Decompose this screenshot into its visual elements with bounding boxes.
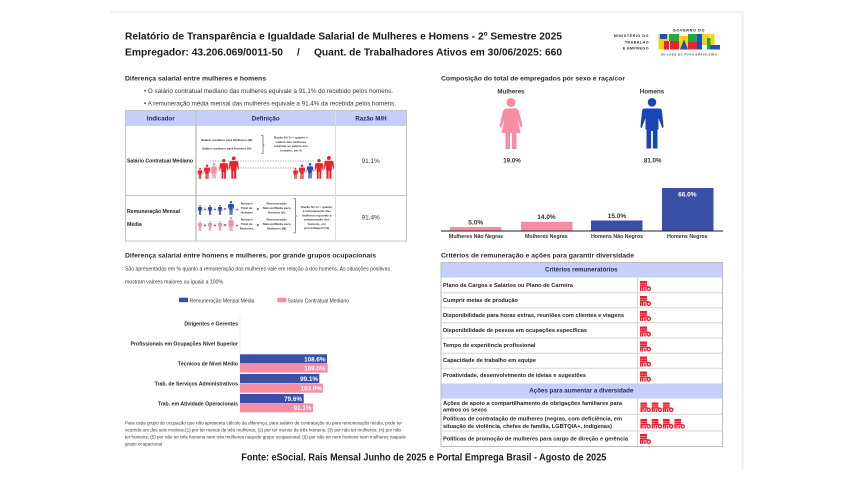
logo: ministério e governo: DO LADO DO POVO BRASILEIRO bbox=[661, 52, 718, 56]
bar chart: sexo e raça: Homens Não Negros bbox=[591, 234, 643, 240]
icons: indicadores de adoção bbox=[640, 281, 684, 444]
section: critérios de remuneração bbox=[441, 253, 722, 446]
bar chart: grupos ocupacionais: 108.6% bbox=[304, 356, 326, 363]
table: critérios: Disponibilidade para horas extras, reuniões com clientes e viagens bbox=[443, 313, 624, 319]
bar chart: sexo e raça: Homens Negros bbox=[667, 234, 708, 240]
bar chart: grupos ocupacionais: Trab. em Atividade Operacionais bbox=[158, 402, 238, 408]
table: critérios bbox=[441, 262, 722, 446]
bullet texts bbox=[144, 88, 396, 108]
legend bbox=[179, 298, 349, 304]
table: indicadores: Razão M/H bbox=[355, 116, 387, 122]
text: explicação: São apresentadas em % quanto a remuneração das mulheres vale em relação à dos homens. As situações positivas bbox=[125, 267, 390, 273]
legend: Remuneração Mensal Média bbox=[190, 298, 255, 304]
title bbox=[125, 32, 562, 58]
table: critérios: Critérios remuneratórios bbox=[545, 267, 618, 274]
footnote: ter homens; (5) por não ter três homens nem três mulheres naquele grupo ocupacional; (6) por não ter nem homens nem mulheres naquele bbox=[125, 435, 406, 440]
table: critérios: Plano de Cargos e Salários ou Plano de Carreira bbox=[443, 283, 574, 289]
bar chart: sexo e raça: 66.0% bbox=[678, 192, 697, 199]
diagram: remuneração média: Total de bbox=[241, 222, 253, 226]
diagram: remuneração média: Homens (H) bbox=[268, 210, 285, 214]
page frame bbox=[110, 12, 742, 470]
diagram: salário mediano bbox=[198, 136, 334, 179]
diagram: remuneração média: mulheres equivale à bbox=[302, 213, 332, 217]
diagram: remuneração média: Número bbox=[241, 218, 253, 222]
title: / bbox=[297, 48, 300, 58]
bar chart: sexo e raça: 14.0% bbox=[537, 214, 556, 221]
table: indicadores: Definição bbox=[252, 116, 280, 122]
diagram: remuneração média: Mulheres bbox=[240, 226, 254, 230]
diagram: remuneração média: ÷ bbox=[236, 223, 239, 229]
diagram: remuneração média: remuneração dos bbox=[304, 218, 330, 222]
table: critérios: ambos os sexos bbox=[443, 408, 487, 414]
bar chart: grupos ocupacionais: 109.0% bbox=[304, 366, 326, 372]
diagram: remuneração média: = bbox=[257, 207, 260, 213]
bar chart: sexo e raça: 5.0% bbox=[468, 220, 483, 226]
diagram: remuneração média: Remuneração bbox=[266, 218, 287, 222]
table: critérios: Disponibilidade de pessoa em ocupações específicas bbox=[443, 328, 587, 334]
title: Empregador: 43.206.069/0011-50 bbox=[125, 48, 283, 58]
bar chart: grupos ocupacionais bbox=[130, 316, 328, 412]
footnote: grupo ocupacional bbox=[125, 442, 162, 447]
heading: Critérios de remuneração e ações para garantir diversidade bbox=[441, 253, 634, 260]
icon: homem: Homens bbox=[640, 88, 665, 95]
table: indicadores: 91.1% bbox=[362, 158, 380, 165]
diagram: remuneração média: porcentagem (%) bbox=[304, 226, 329, 230]
bar chart: grupos ocupacionais: Profissionais em Ocupações Nível Superior bbox=[130, 342, 238, 348]
bar chart: grupos ocupacionais: 99.1% bbox=[300, 376, 318, 383]
bullet texts: • O salário contratual mediano das mulheres equivale a 91.1% do recebido pelos homens. bbox=[144, 88, 393, 95]
diagram: remuneração média: + bbox=[214, 207, 217, 213]
diagram: remuneração média: Homens bbox=[241, 210, 253, 214]
table: indicadores: Salário Contratual Mediano bbox=[127, 158, 193, 164]
diagram: salário mediano: salário das mulheres bbox=[276, 140, 307, 144]
table: indicadores: Média bbox=[127, 222, 142, 228]
diagram: remuneração média: ÷ bbox=[236, 207, 239, 213]
diagram: salário mediano: Razão M / H = quanto o bbox=[274, 136, 308, 140]
table: indicadores: Remuneração Mensal bbox=[127, 209, 181, 215]
footnote bbox=[125, 421, 406, 447]
table: indicadores: Indicador bbox=[147, 116, 175, 122]
title: Quant. de Trabalhadores Ativos em 30/06/2025: 660 bbox=[314, 48, 562, 58]
diagram: remuneração média: Mulheres (M) bbox=[267, 226, 286, 230]
diagram: salário mediano: Salário mediano para Homens (H) bbox=[202, 146, 251, 150]
text: explicação: mostram valores maiores ou iguais a 100% bbox=[125, 280, 223, 286]
diagram: remuneração média: Número bbox=[241, 202, 253, 206]
heading: Diferença salarial entre mulheres e homens bbox=[125, 76, 266, 82]
table: critérios: Tempo de experiência profissional bbox=[443, 343, 536, 349]
bar chart: grupos ocupacionais: 103.9% bbox=[301, 386, 322, 392]
icon: mulher: Mulheres bbox=[497, 88, 525, 95]
section: composição por sexo e raça/cor bbox=[441, 76, 723, 240]
icon: homem bbox=[640, 88, 665, 164]
diagram: remuneração média: homens, em bbox=[308, 222, 326, 226]
diagram: remuneração média: + bbox=[214, 223, 217, 229]
diagram: remuneração média: Mensal Média para bbox=[263, 206, 291, 210]
section: grupos ocupacionais bbox=[125, 253, 406, 447]
logo: ministério e governo bbox=[614, 28, 720, 56]
text: explicação bbox=[125, 267, 390, 286]
diagram: remuneração média: Total de bbox=[241, 206, 253, 210]
table: indicadores bbox=[126, 110, 406, 241]
diagram: remuneração média: Razão M / H = quanto bbox=[301, 205, 332, 209]
icon: mulher bbox=[497, 88, 525, 164]
table: indicadores: 91.4% bbox=[362, 214, 380, 222]
diagram: remuneração média: = bbox=[224, 207, 227, 213]
table: critérios: Ações para aumentar a diversidade bbox=[529, 388, 634, 395]
logo: ministério e governo: MINISTÉRIO DO bbox=[614, 33, 649, 38]
icon: homem: 81.0% bbox=[644, 157, 662, 164]
bar chart: grupos ocupacionais: 79.6% bbox=[284, 396, 302, 403]
logo: ministério e governo: E EMPREGO bbox=[623, 46, 649, 50]
diagram: remuneração média bbox=[198, 198, 332, 233]
bar chart: sexo e raça: Mulheres Negras bbox=[525, 234, 568, 240]
section: diferença salarial bbox=[125, 76, 406, 241]
legend: Salário Contratual Mediano bbox=[288, 298, 349, 304]
logo: ministério e governo: GOVERNO DO bbox=[673, 28, 705, 32]
bullet texts: • A remuneração média mensal das mulheres equivale a 91.4% da recebida pelos homens. bbox=[144, 100, 396, 108]
table: critérios: Políticas de contratação de mulheres (negras, com deficiência, em bbox=[443, 417, 622, 423]
heading: Diferença salarial entre homens e mulheres, por grande grupos ocupacionais bbox=[125, 253, 376, 260]
table: critérios: Capacidade de trabalho em equipe bbox=[443, 358, 536, 364]
table: critérios: Proatividade, desenvolvimento de ideias e sugestões bbox=[443, 373, 586, 379]
bar chart: grupos ocupacionais: 91.1% bbox=[294, 405, 312, 412]
diagram: salário mediano: Salário mediano para Mulheres (M) bbox=[201, 138, 252, 142]
icon: mulher: 19.0% bbox=[503, 157, 521, 164]
footnote: ocorrido um dos seis motivos:(1) por ter menos de três mulheres; (2) por ter menos de três homens; (3) por não ter mulheres; (4) por não bbox=[125, 428, 401, 433]
bar chart: grupos ocupacionais: Técnicos de Nível Médio bbox=[178, 362, 238, 368]
bar chart: grupos ocupacionais: Dirigentes e Gerentes bbox=[184, 322, 238, 328]
bar chart: sexo e raça: Mulheres Não Negras bbox=[449, 234, 503, 240]
heading: Composição do total de empregados por sexo e raça/cor bbox=[441, 76, 625, 83]
title: Relatório de Transparência e Igualdade Salarial de Mulheres e Homens - 2º Semestre 2025 bbox=[125, 32, 562, 42]
diagram: remuneração média: Mensal Média para bbox=[263, 222, 291, 226]
diagram: remuneração média: a remuneração das bbox=[303, 209, 331, 213]
table: critérios: Cumprir metas de produção bbox=[443, 298, 519, 304]
footnote: Para cada grupo de ocupação que não apresenta cálculo da diferença, para salário de contratação ou para remuneração média, pode ter bbox=[125, 421, 402, 426]
diagram: remuneração média: = bbox=[224, 223, 227, 229]
table: critérios: Políticas de promoção de mulheres para cargo de direção e gerência bbox=[443, 436, 629, 442]
diagram: remuneração média: = bbox=[257, 223, 260, 229]
diagram: remuneração média: + bbox=[204, 207, 207, 213]
table: critérios: Ações de apoio a compartilhamento de obrigações familiares para bbox=[443, 401, 623, 407]
fonte: Fonte: eSocial. Rais Mensal Junho de 2025 e Portal Emprega Brasil - Agosto de 2025 bbox=[241, 452, 607, 463]
table: critérios: situação de violência, chefes de família, LGBTQIA+, indígenas) bbox=[443, 424, 612, 430]
diagram: salário mediano: homens, em % bbox=[280, 148, 302, 152]
logo: ministério e governo: TRABALHO bbox=[625, 40, 649, 44]
bar chart: sexo e raça bbox=[441, 188, 723, 240]
diagram: remuneração média: Remuneração bbox=[266, 202, 287, 206]
bar chart: grupos ocupacionais: Trab. de Serviços Administrativos bbox=[155, 382, 238, 388]
diagram: salário mediano: equivale ao salário dos bbox=[274, 144, 308, 148]
diagram: remuneração média: + bbox=[204, 223, 207, 229]
bar chart: sexo e raça: 15.0% bbox=[608, 213, 626, 220]
